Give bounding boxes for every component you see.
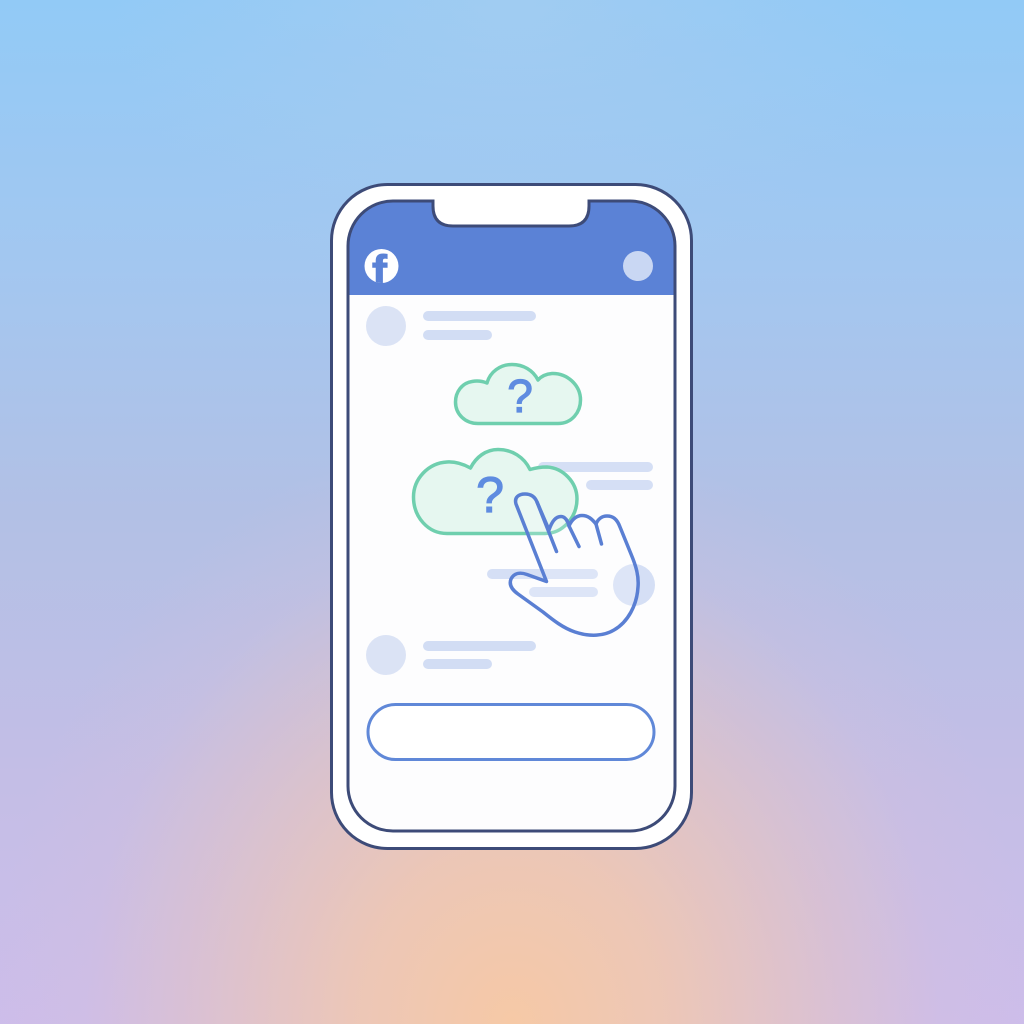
icon: pointing hand [510,494,638,635]
small question cloud [456,364,580,424]
phone [332,184,692,848]
message bars right [538,462,653,490]
phone screen [348,201,675,831]
screen outline with notch [348,201,675,831]
post row 3 [487,564,655,606]
app header bar [348,201,675,295]
icon: facebook logo [364,249,398,283]
post row 1 [366,306,536,346]
large question cloud: ? [476,467,504,523]
small question cloud: ? [507,370,533,422]
phone body [332,184,692,848]
icon: profile circle [623,251,653,281]
post row 4 [366,635,536,675]
large question cloud [414,450,577,534]
input pill [368,704,654,760]
icon: facebook logo: f [372,246,388,297]
